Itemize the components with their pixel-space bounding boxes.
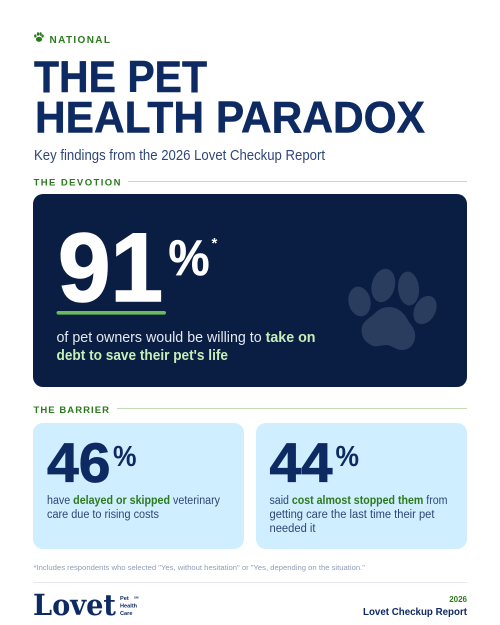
section heading: the devotion: THE DEVOTION	[34, 177, 121, 188]
stat description: debt to save their pet's life	[56, 348, 228, 364]
eyebrow: national: NATIONAL	[50, 35, 110, 46]
panel: 91 percent devotion	[33, 194, 467, 387]
logo: Lovet: Care	[120, 611, 132, 617]
logo: Lovet: Health	[120, 604, 138, 610]
footer report label: Lovet Checkup Report	[363, 606, 467, 618]
panel: 44 percent	[256, 423, 467, 549]
description	[47, 495, 220, 521]
big stat: 91%: *	[212, 235, 218, 252]
panel: 46 percent	[33, 423, 244, 549]
footnote: *Includes respondents who selected "Yes, without hesitation" or "Yes, depending on the situation."	[34, 563, 365, 572]
stat: 44%	[270, 432, 359, 494]
green accent bar	[56, 311, 166, 315]
stat description: of pet owners would be willing to take on	[56, 330, 316, 346]
icon: faded paw	[346, 266, 441, 350]
description: said cost almost stopped them from	[270, 495, 448, 507]
subtitle: Key findings from the 2026 Lovet Checkup Report	[34, 148, 325, 164]
logo: Lovet: Lovet	[33, 588, 117, 622]
description: getting care the last time their pet	[270, 509, 435, 521]
logo: Lovet: Pet	[120, 596, 129, 602]
icon: small green paw	[34, 32, 44, 42]
big stat: 91%	[58, 213, 218, 322]
title	[34, 53, 425, 142]
stat: 46%: %	[113, 441, 137, 473]
logo: Lovet: SM	[134, 596, 139, 600]
stat: 44%: %	[336, 441, 359, 473]
stat description	[56, 330, 316, 364]
title: THE PET	[34, 53, 207, 102]
description: needed it	[270, 523, 316, 535]
stat: 46%	[47, 432, 137, 494]
footer report label: 2026	[449, 595, 468, 604]
big stat: 91%: 91	[58, 213, 163, 322]
big stat: 91%: %	[168, 230, 210, 286]
stat: 46%: 46	[47, 432, 110, 494]
section heading: the barrier: THE BARRIER	[34, 405, 109, 416]
stat: 44%: 44	[270, 432, 333, 494]
description: care due to rising costs	[47, 509, 159, 521]
title: HEALTH PARADOX	[35, 94, 425, 142]
footer report label	[363, 595, 468, 618]
description	[270, 495, 448, 535]
eyebrow: national	[34, 32, 110, 46]
description: have delayed or skipped veterinary	[47, 495, 220, 507]
